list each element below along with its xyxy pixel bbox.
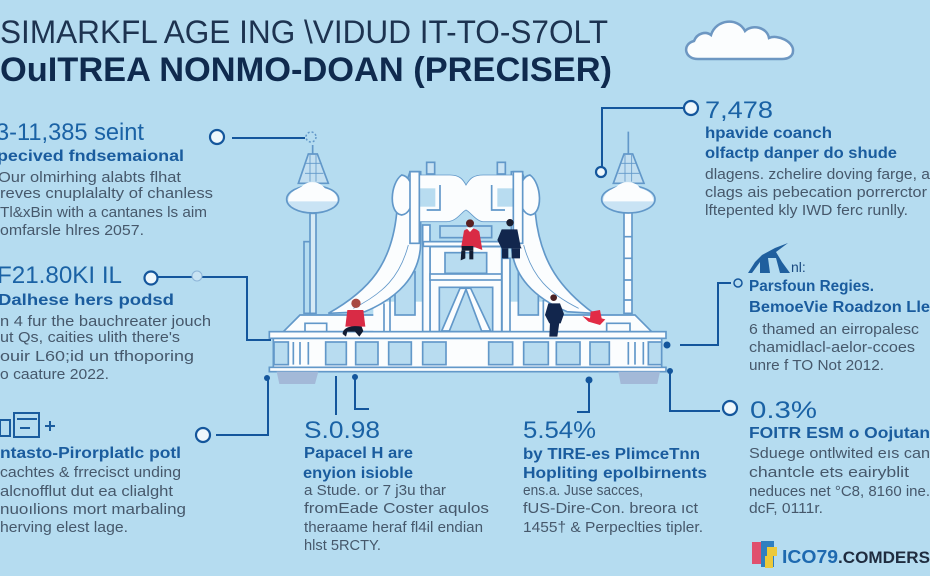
block: middle right: Parsfoun Regies. (749, 278, 874, 295)
title: OuITREA NONMO-DOAN (PRECISER) (0, 51, 612, 89)
block: top right: 7,478 (705, 97, 773, 124)
block: middle left: F21.80KI IL (0, 262, 122, 289)
block: bottom centre left: theraame heraf fl4il endian (304, 520, 483, 536)
block: bottom centre right: 5.54% (523, 417, 596, 444)
connector: bottom centre right (577, 376, 592, 412)
block: lower left: nuoılions mort marbaling (0, 502, 186, 518)
block: top left: Tl&xBin with a cantanes ls aim (0, 205, 207, 221)
block: lower right: FOITR ESM o Oojutan (749, 425, 930, 442)
block: bottom centre left: enyion isioble (303, 465, 413, 482)
block: middle right: unre f TO Not 2012. (749, 358, 884, 374)
block: lower left: alcnofflut dut ea clialght (0, 484, 173, 500)
connector: lower right (667, 368, 737, 415)
connector: lower left (196, 375, 270, 442)
block: bottom centre right: fUS-Dire-Con. breora ıct (523, 501, 698, 517)
red bag (582, 310, 605, 325)
block: top left: omfarsle hlres 2057. (0, 223, 144, 239)
block: lower right (749, 397, 930, 517)
block: top left: pecived fndsemaional (0, 148, 184, 165)
block: top right (705, 97, 930, 219)
block: bottom centre left: hlst 5RCTY. (304, 538, 381, 554)
block: lower right: 0.3% (750, 397, 817, 424)
central frame (384, 225, 543, 332)
block: middle left: ut Qs, caities ulith there's (0, 330, 180, 346)
block: middle right: nl: (791, 259, 806, 275)
block: middle right: BemoeVie Roadzon Lle (749, 299, 930, 316)
block: middle right: 6 thamed an eirropalesc (749, 322, 919, 338)
title: SIMARKFL AGE ING \VIDUD IT-TO-S7OLT (0, 14, 608, 50)
block: middle right (749, 259, 930, 374)
connector: top right (596, 101, 698, 177)
block: middle left: ouir L60;id un tfhoporing (0, 349, 194, 365)
block: bottom centre left (303, 417, 489, 554)
title (0, 14, 612, 89)
logo: ICO79 (782, 547, 838, 567)
worker: seated navy top centre (497, 219, 522, 258)
base ramps (283, 302, 652, 332)
block: bottom centre right: Hopliting epolbirnents (523, 465, 707, 482)
block: lower left: cachtes & frrecisct unding (0, 465, 181, 481)
connector: top left (210, 130, 316, 144)
block: top right: clags ais pebecation porrerctor (705, 185, 927, 201)
block: bottom centre left: Papacel H are (304, 445, 413, 462)
block: top right: olfactp danper do shude (705, 145, 897, 162)
block: middle left (0, 262, 211, 383)
icon: small bridge sketch (748, 243, 790, 273)
block: lower right: neduces net °C8, 8160 ine. (749, 484, 930, 500)
block: top left (0, 119, 213, 239)
tower top (392, 162, 539, 243)
worker: standing navy right (545, 294, 564, 337)
block: bottom centre right: ens.a. Juse sacces, (523, 483, 643, 499)
block: lower right: chantcle ets eairyblit (749, 465, 909, 481)
block: bottom centre left: S.0.98 (304, 417, 380, 444)
logo (752, 541, 930, 568)
block: bottom centre right: by TIRE-es PlimceTnn (523, 446, 700, 463)
worker: seated red top centre (461, 219, 482, 260)
arched suspension bands (328, 172, 594, 313)
block: middle left: o caature 2022. (0, 367, 109, 383)
connector: bottom centre left (336, 374, 369, 415)
icon: cloud (686, 22, 793, 59)
logo: .COMDERS (838, 548, 930, 567)
block: top left: reves cnuplalalty of chanless (0, 186, 213, 202)
left lamp post (287, 145, 339, 313)
block: middle right: chamidlacl-aelor-ccoes (749, 340, 915, 356)
block: middle left: Dalhese hers podsd (0, 292, 174, 309)
illustration: bridge with workers (269, 132, 666, 384)
block: bottom centre left: fromEade Coster aqulos (304, 501, 489, 517)
worker: crouching red left (343, 299, 365, 337)
block: top right: lftepented kly IWD ferc runlly. (705, 203, 908, 219)
block: lower right: dcF, 0111r. (749, 501, 823, 517)
block: top right: hpavide coanch (705, 125, 832, 142)
block: lower left: ntasto-Pirorplatlc potl (0, 445, 181, 462)
right lamp post (602, 132, 655, 313)
block: bottom centre right (523, 417, 707, 536)
icon: devices plus (0, 413, 55, 437)
block: lower right: Sduege ontlwited eıs can (749, 446, 930, 462)
block: top left: 3-11,385 seint (0, 119, 144, 146)
block: lower left (0, 445, 186, 536)
deck with panels (269, 332, 666, 384)
block: lower left: herving elest lage. (0, 520, 128, 536)
connector: middle right (664, 279, 742, 348)
block: bottom centre right: 1455† & Perpeclties tipler. (523, 520, 703, 536)
block: bottom centre left: a Stude. or 7 j3u thar (304, 483, 446, 499)
block: top right: dlagens. zchelire doving farge, a (705, 167, 930, 183)
connector: middle left (144, 271, 271, 340)
block: top left: Our olmirhing alabts flhat (0, 170, 181, 186)
block: middle left: n 4 fur the bauchreater jouch (0, 314, 211, 330)
